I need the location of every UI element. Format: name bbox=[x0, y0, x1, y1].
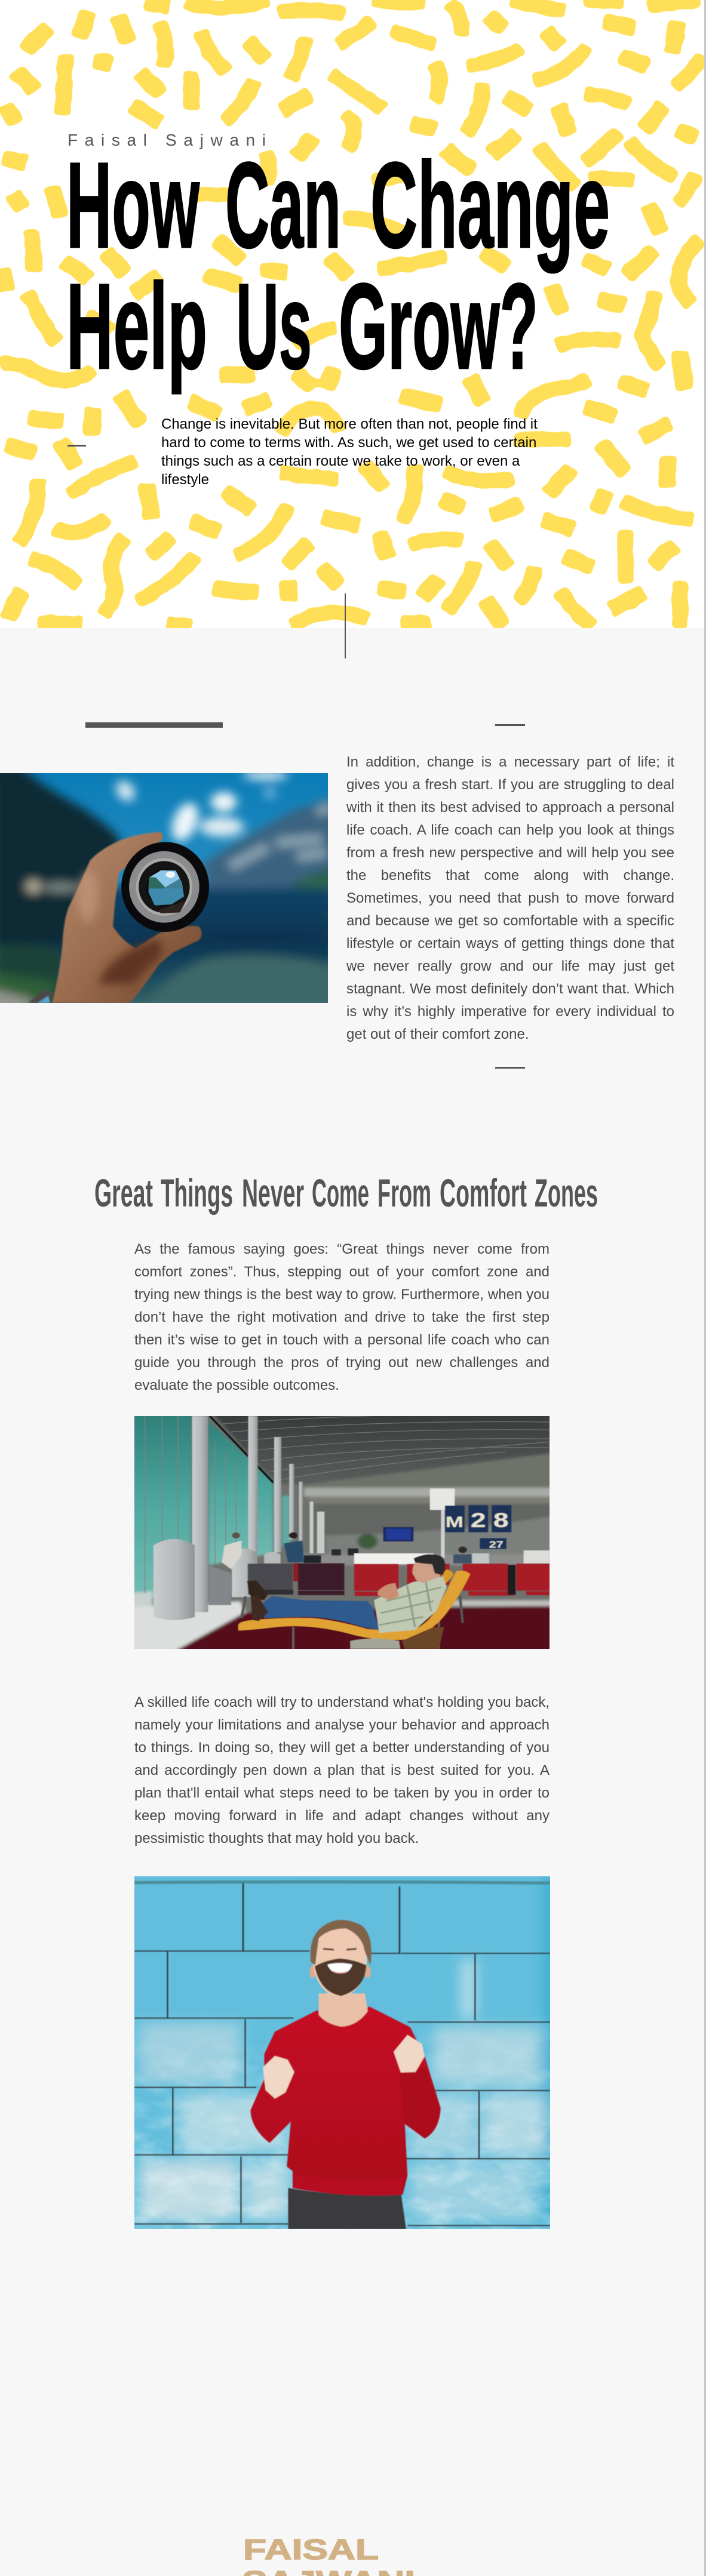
paragraph: change is a necessary part of life: and because we get so comfortable with a specific bbox=[346, 913, 674, 929]
section heading: Never bbox=[242, 1171, 304, 1215]
footer brand name bbox=[242, 2534, 415, 2576]
author name: Faisal Sajwani bbox=[67, 131, 266, 149]
paragraph: skilled life coach bbox=[134, 1694, 550, 1846]
photo: hand holding lens over lake bbox=[0, 773, 328, 1003]
panel: hero with yellow brush pattern bbox=[0, 0, 704, 628]
intro text: lifestyle bbox=[161, 472, 209, 488]
thick bar above photo bbox=[85, 722, 223, 728]
title bbox=[66, 143, 610, 395]
paragraph: change is a necessary part of life: stagnant. We most definitely don’t want that. Which bbox=[346, 981, 674, 997]
photo: man relaxing in airport lounge: M bbox=[446, 1514, 463, 1531]
paragraph: change is a necessary part of life: we never really grow and our life may just get bbox=[346, 958, 674, 974]
photo: man relaxing in airport lounge: 27 bbox=[489, 1539, 504, 1550]
paragraph: change is a necessary part of life: In addition, change is a necessary part of life; it bbox=[346, 754, 674, 770]
paragraph: change is a necessary part of life: from a fresh new perspective and will help you see bbox=[346, 845, 674, 861]
paragraph: skilled life coach: plan that'll entail what steps need to be taken by you in order to bbox=[134, 1785, 550, 1801]
paragraph: skilled life coach: and accordingly pen down a plan that is best suited for you. A bbox=[134, 1762, 550, 1778]
paragraph: comfort zones: don’t have the right motivation and drive to take the first step bbox=[134, 1309, 550, 1325]
right edge strip bbox=[704, 0, 706, 2576]
paragraph: change is a necessary part of life: life coach. A life coach can help you look at things bbox=[346, 822, 674, 838]
dash beside intro bbox=[67, 445, 86, 447]
intro text bbox=[161, 416, 538, 488]
paragraph: skilled life coach: keep moving forward in life and adapt changes without any bbox=[134, 1808, 550, 1824]
yellow brush stroke pattern bbox=[0, 0, 704, 628]
paragraph: skilled life coach: pessimistic thoughts that may hold you back. bbox=[134, 1830, 419, 1846]
vertical connector line bbox=[345, 593, 346, 658]
title: Help bbox=[66, 258, 207, 395]
photo: man relaxing in airport lounge: 2 bbox=[471, 1509, 486, 1532]
intro text: things such as a certain route we take to work, or even a bbox=[161, 453, 520, 469]
footer brand name: FAISAL bbox=[243, 2534, 379, 2566]
section heading: Comfort bbox=[440, 1171, 527, 1215]
paragraph: comfort zones: trying new things is the best way to grow. Furthermore, when you bbox=[134, 1287, 550, 1303]
paragraph: change is a necessary part of life: gives you a fresh start. If you are struggling to deal bbox=[346, 777, 674, 793]
title: Us bbox=[236, 258, 312, 395]
section heading bbox=[94, 1171, 598, 1215]
paragraph: comfort zones: comfort zones”. Thus, stepping out of your comfort zone and bbox=[134, 1264, 550, 1280]
section heading: From bbox=[377, 1171, 431, 1215]
photo: joyful man against blue wall bbox=[134, 1876, 550, 2229]
paragraph: skilled life coach: namely your limitations and analyse your behavior and approach bbox=[134, 1717, 550, 1733]
photo: man relaxing in airport lounge bbox=[134, 1416, 550, 1649]
paragraph: skilled life coach: to things. In doing so, they will get a better understanding of you bbox=[134, 1740, 550, 1756]
paragraph: comfort zones: then it’s wise to get in touch with a personal life coach who can bbox=[134, 1332, 550, 1348]
section heading: Great bbox=[94, 1171, 153, 1215]
paragraph: comfort zones: evaluate the possible outcomes. bbox=[134, 1377, 339, 1393]
paragraph: change is a necessary part of life bbox=[346, 754, 674, 1042]
paragraph: change is a necessary part of life: lifestyle or certain ways of getting things done that bbox=[346, 935, 674, 952]
intro text: Change is inevitable. But more often than not, people find it bbox=[161, 416, 538, 432]
paragraph: change is a necessary part of life: with it then its best advised to approach a personal bbox=[346, 799, 674, 815]
paragraph: comfort zones bbox=[134, 1241, 550, 1393]
paragraph: comfort zones: guide you through the pros of trying out new challenges and bbox=[134, 1355, 550, 1371]
paragraph: change is a necessary part of life: get out of their comfort zone. bbox=[346, 1026, 529, 1042]
dash below paragraph bbox=[495, 1067, 525, 1069]
section heading: Things bbox=[161, 1171, 233, 1215]
paragraph: comfort zones: As the famous saying goes: “Great things never come from bbox=[134, 1241, 550, 1257]
section heading: Come bbox=[312, 1171, 369, 1215]
photo: man relaxing in airport lounge: 8 bbox=[493, 1509, 509, 1532]
paragraph: change is a necessary part of life: Sometimes, you need that push to move forward bbox=[346, 890, 674, 906]
paragraph: change is a necessary part of life: the benefits that come along with change. bbox=[346, 867, 674, 884]
intro text: hard to come to terms with. As such, we get used to certain bbox=[161, 435, 536, 451]
paragraph: change is a necessary part of life: is why it’s highly imperative for every individual to bbox=[346, 1004, 674, 1020]
dash above paragraph bbox=[495, 724, 525, 726]
paragraph: skilled life coach: A skilled life coach will try to understand what's holding you back, bbox=[134, 1694, 550, 1710]
